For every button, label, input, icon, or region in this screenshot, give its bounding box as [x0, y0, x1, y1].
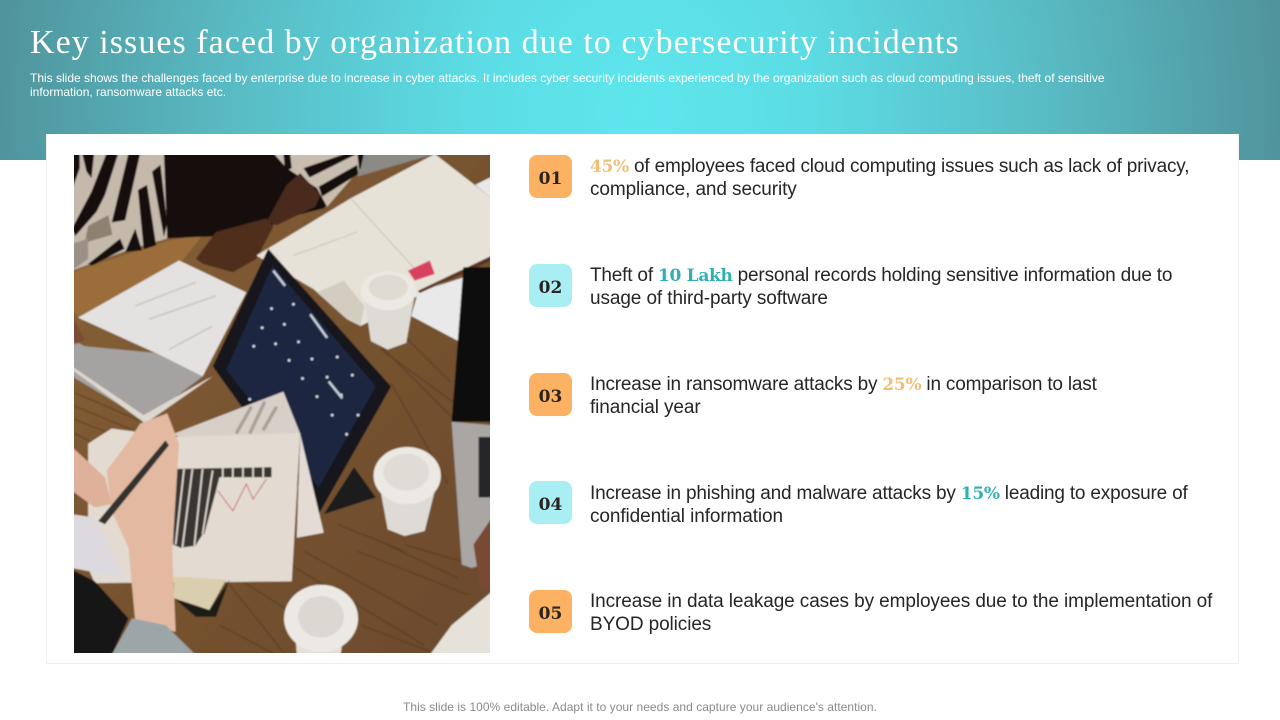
item 2 text: Theft of 10 Lakh personal records holding sensitive information due to: [590, 265, 1172, 286]
laptop: [452, 267, 492, 422]
item 3 text: financial year: [590, 397, 701, 418]
report papers: [174, 392, 300, 440]
cup bottom: [293, 608, 347, 655]
panel: content card: [46, 134, 1239, 664]
subtitle text: This slide shows the challenges faced by enterprise due to increase in cyber attacks. It includes cyber security incidents experienced by the organization such as cloud computing issues, theft of sensitive: [30, 71, 1105, 85]
tablet: [213, 249, 391, 514]
item 1 text: 45% of employees faced cloud computing issues such as lack of privacy,: [590, 156, 1189, 177]
photo: team reviewing reports at a table: [74, 155, 490, 653]
item 5 text: BYOD policies: [590, 614, 711, 635]
badge: 03: 03: [539, 387, 562, 407]
shirt: [162, 153, 364, 239]
badge: 03: [529, 373, 572, 416]
badge: 05: 05: [539, 604, 562, 624]
badge: 05: [529, 590, 572, 633]
badge: 01: [529, 155, 572, 198]
item 5 text: [590, 591, 1212, 635]
cup right: [379, 484, 436, 536]
wood grain: [68, 329, 472, 655]
subtitle text: information, ransomware attacks etc.: [30, 85, 226, 99]
hands: [72, 447, 112, 507]
badge: 04: [529, 481, 572, 524]
badge: 01: 01: [539, 169, 562, 189]
header band: [0, 0, 1280, 160]
coffee cup top: [364, 296, 415, 350]
item 4 text: confidential information: [590, 506, 783, 527]
footer note: This slide is 100% editable. Adapt it to your needs and capture your audience's attention.: [403, 700, 877, 714]
left paper: [78, 261, 246, 376]
subtitle text: [30, 71, 1105, 99]
item 3 text: [590, 374, 1097, 418]
item 1 text: compliance, and security: [590, 179, 797, 200]
item 1 text: [590, 156, 1189, 200]
badge: 04: 04: [539, 495, 562, 515]
item 5 text: Increase in data leakage cases by employees due to the implementation of: [590, 591, 1212, 612]
item 2 text: [590, 265, 1172, 309]
item 3 text: Increase in ransomware attacks by 25% in comparison to last: [590, 374, 1097, 395]
item 4 text: [590, 483, 1188, 527]
notebook under papers: [174, 576, 226, 610]
badge: 02: 02: [539, 278, 562, 298]
notebook: [256, 154, 492, 326]
badge: 02: [529, 264, 572, 307]
title: Key issues faced by organization due to cybersecurity incidents: [30, 24, 960, 61]
item 4 text: Increase in phishing and malware attacks by 15% leading to exposure of: [590, 483, 1188, 504]
item 2 text: usage of third-party software: [590, 288, 828, 309]
